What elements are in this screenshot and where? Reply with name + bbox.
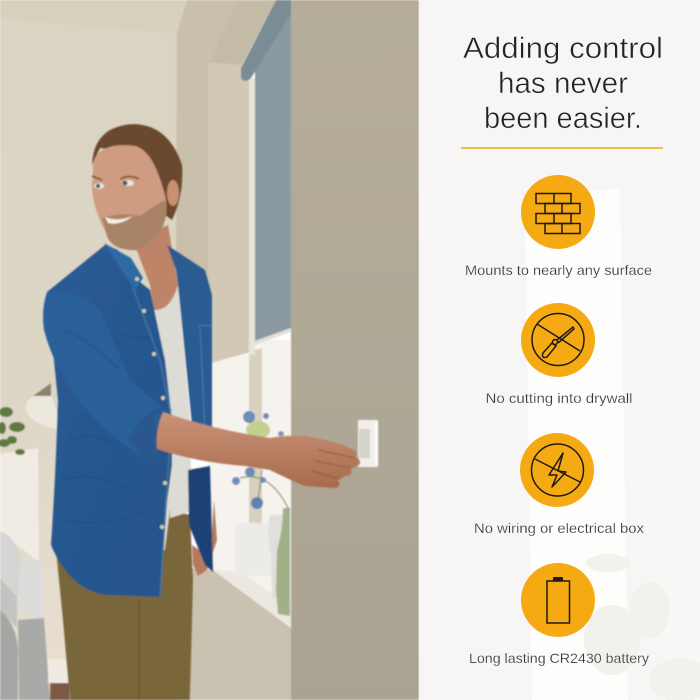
buttons (135, 277, 167, 529)
white frame strip (249, 78, 255, 355)
tee shirt (152, 285, 191, 518)
floor (50, 683, 70, 700)
feature: drywall (486, 303, 632, 406)
illustration: man reaching for switch (43, 124, 360, 700)
shirt body (47, 245, 172, 597)
feature: battery (469, 563, 649, 666)
armchair (0, 532, 25, 597)
sleeve (43, 292, 163, 462)
pocket (198, 325, 212, 430)
soffit (210, 0, 276, 65)
icon: brick wall (521, 175, 595, 249)
reveal lower edge (208, 64, 250, 364)
smile (105, 216, 133, 224)
white vase (268, 515, 284, 600)
shirt right side (167, 245, 212, 432)
flower stems (240, 440, 290, 510)
feature: surface (465, 175, 652, 278)
table lamp (25, 383, 59, 429)
icon: crossed-out lightning bolt (520, 433, 594, 507)
forearm and hand (157, 412, 360, 488)
lower wall under sill (190, 568, 291, 700)
window sill (213, 570, 291, 628)
title: Adding control (463, 32, 663, 65)
label: Long lasting CR2430 battery (469, 650, 649, 666)
neck (133, 225, 178, 310)
label: No cutting into drywall (486, 390, 632, 406)
window reveal (208, 63, 250, 364)
light shaft (525, 188, 628, 700)
icon: battery (521, 563, 595, 637)
ear (167, 180, 179, 206)
ceiling (0, 0, 188, 33)
sunlit wall patch (0, 448, 39, 562)
lower hand (192, 500, 217, 576)
title (463, 32, 663, 135)
eyes (94, 183, 104, 189)
right light area (665, 160, 700, 700)
shirt folds (60, 330, 155, 523)
hair (92, 124, 182, 220)
face (92, 145, 166, 250)
icon: crossed-out knife (521, 303, 595, 377)
panel background (419, 0, 700, 700)
wall switch (358, 420, 378, 467)
column (176, 0, 236, 345)
trousers (56, 510, 193, 700)
placket (133, 288, 172, 597)
back wall (0, 0, 180, 700)
title rule (461, 147, 663, 149)
baseboard (48, 659, 70, 683)
shirt lower right (188, 466, 213, 572)
window mullion (249, 348, 262, 525)
title: been easier. (484, 102, 642, 135)
plant (0, 407, 25, 455)
flowers (246, 421, 270, 439)
roller blind (255, 8, 291, 341)
beard (102, 200, 166, 250)
blind roller (241, 0, 291, 81)
faint plant (584, 554, 700, 700)
white speaker (235, 523, 272, 576)
panel: room photo (0, 0, 419, 700)
blind hem (255, 328, 291, 345)
panel: feature column (419, 0, 700, 700)
collar (104, 243, 143, 290)
sleeve cuff (128, 407, 173, 463)
label: Mounts to nearly any surface (465, 262, 652, 278)
title: has never (498, 67, 628, 100)
foreground wall (291, 0, 419, 700)
feature: wiring (474, 433, 644, 536)
label: No wiring or electrical box (474, 520, 644, 536)
green vase (276, 508, 290, 616)
bright window (208, 340, 292, 630)
